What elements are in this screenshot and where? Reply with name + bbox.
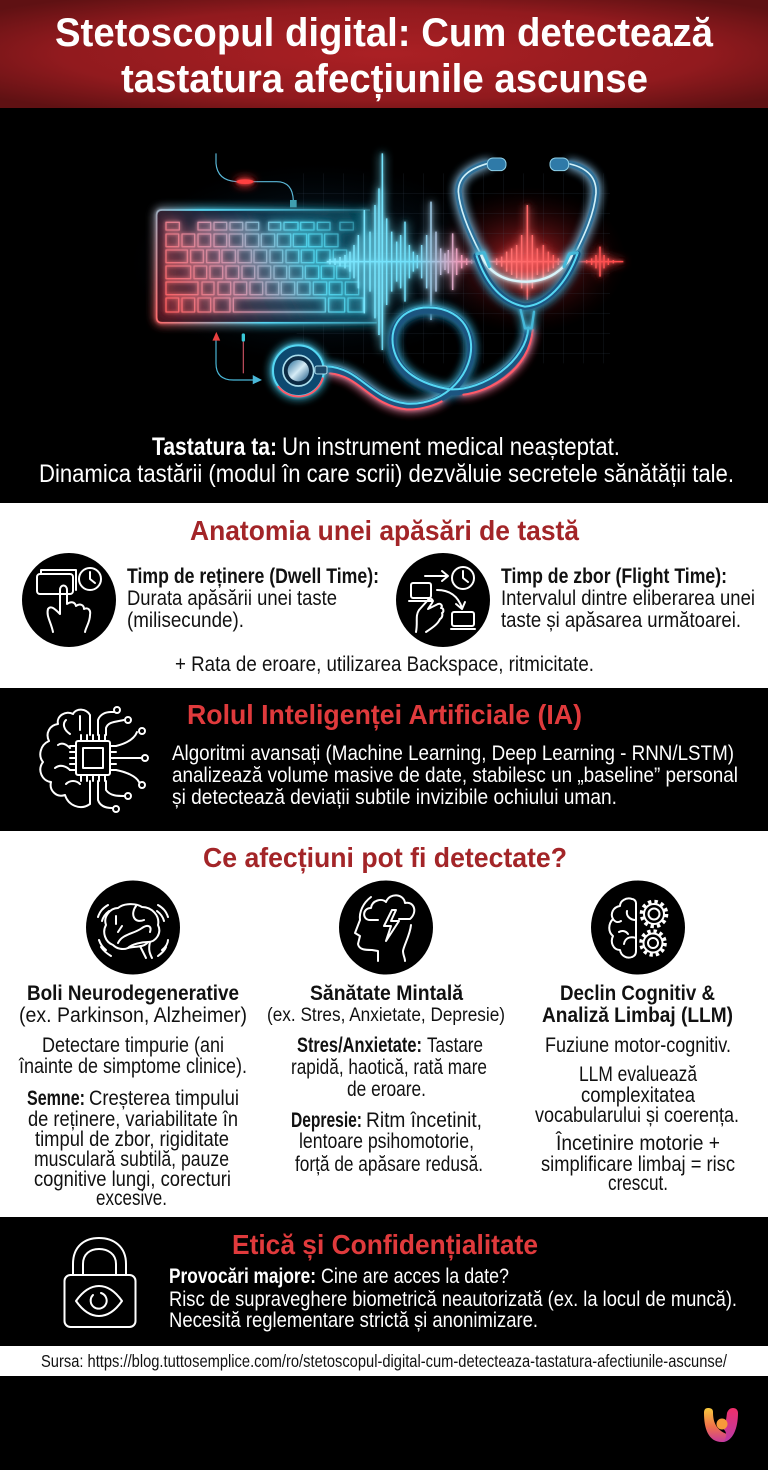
signs text: musculară subtilă, pauze [34, 1148, 229, 1171]
column: neurodegenerative [18, 880, 247, 1210]
depression text: Depresie: [291, 1109, 362, 1132]
body text: Cine are acces la date? [321, 1265, 509, 1288]
title: Analiză Limbaj (LLM) [542, 1004, 733, 1027]
chest piece [273, 345, 327, 396]
motor-cognitive text: Fuziune motor-cognitiv. [545, 1034, 731, 1057]
flight time text [501, 565, 755, 632]
signs text: timpul de zbor, rigiditate [35, 1128, 229, 1151]
icon: brain with chip [40, 707, 148, 812]
column: mental health [267, 880, 505, 1176]
signs text: cognitive lungi, corecturi [34, 1168, 231, 1191]
icon: dwell time [22, 553, 116, 647]
title: Declin Cognitiv & [560, 982, 715, 1005]
intro text: Un instrument medical neașteptat. [282, 433, 620, 461]
binaurals [458, 163, 596, 254]
flight time text: Timp de zbor (Flight Time): [501, 565, 727, 588]
title [19, 982, 247, 1027]
body text: și detectează deviații subtile invizibile ochiului uman. [172, 786, 617, 809]
dwell time text: (milisecunde). [127, 609, 244, 632]
signs text: excesive. [96, 1187, 167, 1210]
stress text: de eroare. [347, 1078, 426, 1101]
signs text [27, 1087, 239, 1210]
icon: padlock with eye [64, 1238, 136, 1327]
stress text [291, 1034, 487, 1101]
title: Sănătate Mintală [310, 982, 463, 1005]
heading: Anatomia unei apăsări de tastă [190, 515, 579, 546]
ear tips [487, 158, 569, 171]
title: Stetoscopul digital: Cum detectează [55, 11, 714, 55]
stress text: Tastare [427, 1034, 483, 1057]
early detection text [18, 1034, 247, 1078]
body text [172, 742, 738, 809]
signs text: Creșterea timpului [89, 1087, 239, 1110]
body text: Provocări majore: [169, 1265, 316, 1288]
depression text: Ritm încetinit, [366, 1109, 482, 1132]
keyboard cable [216, 153, 297, 207]
panel: detectable conditions [0, 831, 768, 1217]
title: tastatura afecțiunile ascunse [121, 57, 648, 101]
LLM text: LLM evaluează [579, 1063, 697, 1086]
waveform [327, 153, 623, 350]
panel: hero [0, 108, 768, 503]
extra metrics note: + Rata de eroare, utilizarea Backspace, ritmicitate. [175, 653, 594, 676]
panel: keystroke anatomy [0, 503, 768, 688]
LLM text [535, 1063, 739, 1127]
panel: title banner [0, 0, 768, 108]
icon: flight time [396, 553, 490, 647]
stress text: Stres/Anxietate: [297, 1034, 422, 1057]
risk text: Încetinire motorie + [555, 1132, 720, 1155]
body text: Necesită reglementare strictă și anonimizare. [169, 1309, 538, 1332]
dwell time text: Durata apăsării unei taste [127, 587, 337, 610]
title: (ex. Parkinson, Alzheimer) [19, 1004, 247, 1027]
depression text [291, 1109, 483, 1176]
stethoscope [273, 158, 596, 409]
flight time text: taste și apăsarea următoarei. [501, 609, 741, 632]
title [55, 11, 714, 101]
logo [704, 1408, 738, 1442]
title: Boli Neurodegenerative [27, 982, 239, 1005]
LLM text: vocabularului și coerența. [535, 1104, 739, 1127]
heading: Etică și Confidențialitate [232, 1229, 538, 1260]
timing arrows [213, 333, 261, 383]
signs text: Semne: [27, 1087, 85, 1110]
panel: ethics and privacy [0, 1217, 768, 1347]
LLM text: complexitatea [581, 1084, 695, 1107]
dwell time text: Timp de reținere (Dwell Time): [127, 565, 379, 588]
early detection text: Detectare timpurie (ani [42, 1034, 224, 1057]
illustration: keyboard, waveform and stethoscope [130, 153, 627, 409]
icon: brain with tremor [86, 880, 180, 974]
depression text: lentoare psihomotorie, [299, 1130, 474, 1153]
body text [169, 1265, 737, 1332]
icon: brain and gears [591, 880, 685, 974]
stress text: rapidă, haotică, rată mare [291, 1056, 487, 1079]
panel: role of AI [0, 688, 768, 831]
column: cognitive decline [535, 880, 739, 1195]
headset yoke [477, 253, 577, 328]
heading: Ce afecțiuni pot fi detectate? [203, 842, 567, 873]
dwell time text [127, 565, 379, 632]
intro text [39, 433, 734, 488]
icon: head with storm [339, 880, 433, 974]
source strip [0, 1346, 768, 1376]
early detection text: înainte de simptome clinice). [18, 1055, 247, 1078]
risk text: simplificare limbaj = risc [541, 1153, 735, 1176]
stethoscope tubing [327, 307, 533, 409]
risk text: crescut. [608, 1172, 668, 1195]
title: (ex. Stres, Anxietate, Depresie) [267, 1005, 505, 1026]
risk text [541, 1132, 735, 1195]
intro text: Tastatura ta: [152, 433, 277, 461]
title [267, 982, 505, 1026]
depression text: forță de apăsare redusă. [295, 1153, 483, 1176]
heading: Rolul Inteligenței Artificiale (IA) [187, 699, 582, 730]
keyboard [157, 210, 377, 323]
signs text: de reținere, variabilitate în [28, 1108, 238, 1131]
title [542, 982, 733, 1027]
